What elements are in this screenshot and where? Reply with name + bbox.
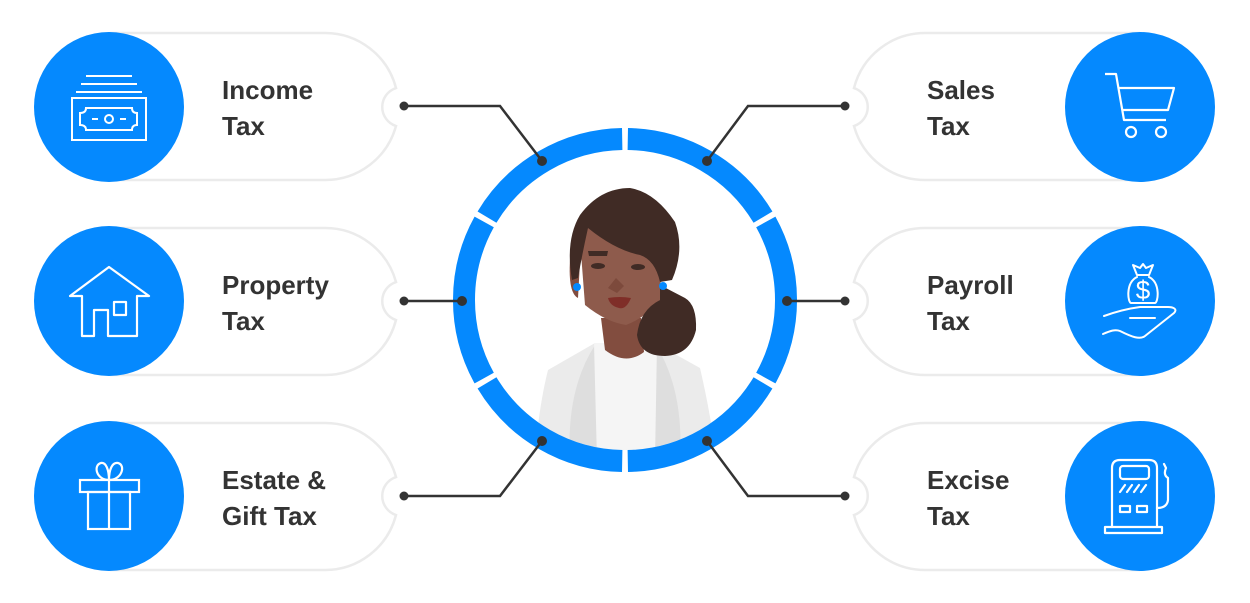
connector: property: [400, 296, 467, 306]
card: estate & gift tax: Gift Tax: [222, 501, 317, 531]
hair: [570, 188, 679, 282]
label: sales tax: Sales: [927, 75, 995, 105]
card: excise tax: Tax: [927, 501, 970, 531]
neck: [601, 318, 644, 359]
card: property tax: [34, 226, 396, 376]
jacket: [538, 344, 711, 439]
card: payroll tax: Tax: [927, 306, 970, 336]
center: person portrait: [538, 188, 711, 450]
ponytail: [637, 285, 696, 356]
icon: hand with money bag: $: [1136, 275, 1151, 305]
card: estate & gift tax: [34, 421, 396, 571]
card: income tax: Tax: [222, 111, 265, 141]
card: sales tax: [854, 32, 1215, 182]
ring: segmented blue circle: [464, 139, 786, 461]
connector: payroll: [782, 296, 850, 306]
connector: excise: [702, 436, 850, 500]
card: income tax: [34, 32, 396, 182]
connector: income: [400, 102, 547, 166]
label: excise tax: Excise: [927, 465, 1009, 495]
icon: money stack: [72, 76, 146, 140]
card: payroll tax: [854, 226, 1215, 376]
connector: sales: [702, 102, 850, 166]
card: property tax: Tax: [222, 306, 265, 336]
icon: hand with money bag: [1103, 264, 1175, 338]
icon: cart: [1105, 74, 1174, 137]
connectors: [400, 102, 850, 500]
earrings: [573, 283, 581, 291]
label: payroll tax: Payroll: [927, 270, 1014, 300]
card: excise tax: [854, 421, 1215, 571]
icon: fuel pump: [1105, 460, 1168, 533]
card: sales tax: Tax: [927, 111, 970, 141]
connector: estate: [400, 436, 547, 500]
label: income tax: Income: [222, 75, 313, 105]
ears/face: [570, 260, 580, 298]
icon: gift: [80, 463, 139, 529]
eyebrows, eyes, nose, mouth: [588, 251, 608, 256]
label: estate & gift tax: Estate &: [222, 465, 326, 495]
label: property tax: Property: [222, 270, 329, 300]
icon: house: [70, 267, 149, 336]
